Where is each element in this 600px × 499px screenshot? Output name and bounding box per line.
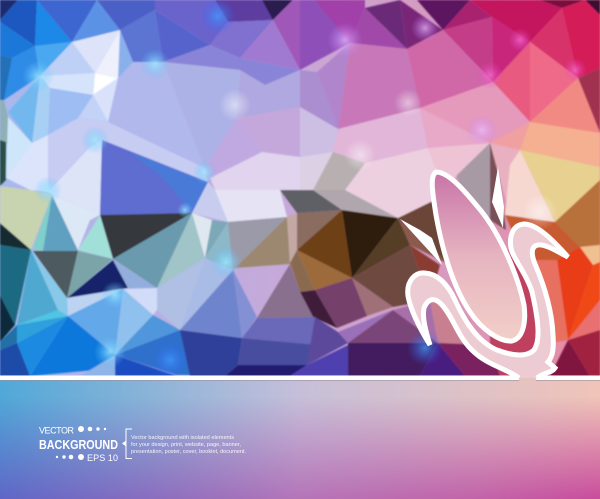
white horizon line [0, 376, 600, 381]
icon: corn [400, 167, 568, 378]
description text: Vector background with isolated elements [131, 435, 234, 441]
polygon background mesh [0, 0, 600, 376]
top dots [78, 426, 106, 432]
description text: presentation, poster, cover, booklet, document. [131, 449, 246, 455]
label: eps 10: EPS 10 [87, 453, 118, 463]
bottom dots [56, 454, 84, 460]
bottom gradient band [0, 376, 600, 499]
label: vector: VECTOR [39, 426, 74, 436]
logo block: vector background eps 10 [39, 426, 118, 463]
label: background: BACKGROUND [39, 437, 118, 452]
description text [131, 435, 246, 455]
small left husk [400, 219, 442, 265]
small top husk [492, 167, 504, 228]
bracket [122, 429, 132, 458]
description text: for your design, print, website, page, banner, [131, 442, 241, 448]
light glows [22, 0, 587, 378]
corn leaves outline [408, 224, 568, 378]
corn ear [432, 172, 525, 341]
